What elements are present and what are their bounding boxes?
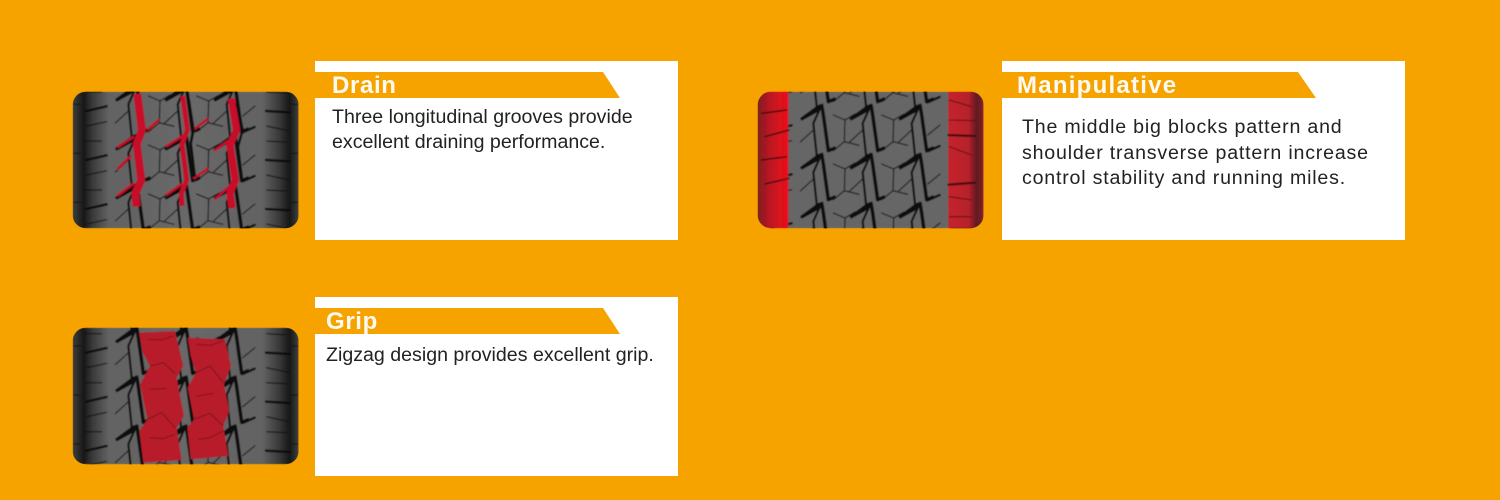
panel: manipulative [1002, 61, 1405, 240]
panel: drain [315, 61, 678, 240]
heading: drain: Drain [332, 72, 397, 99]
text: manipulative description: shoulder transverse pattern increase [1022, 142, 1369, 164]
tire tread: grip, red centre blocks [72, 328, 299, 464]
tire tread: drain, red longitudinal grooves [72, 92, 299, 228]
tire tread: manipulative, red shoulder bands [758, 92, 984, 228]
panel: grip [315, 297, 678, 476]
heading: grip: Grip [326, 308, 378, 335]
text: drain description [332, 106, 633, 153]
text: drain description: Three longitudinal grooves provide [332, 106, 633, 128]
text: grip description: Zigzag design provides excellent grip. [326, 344, 654, 366]
heading: manipulative: Manipulative [1017, 72, 1177, 99]
heading banner: manipulative [1002, 72, 1316, 98]
text: manipulative description [1022, 116, 1369, 189]
heading banner: grip [315, 308, 620, 334]
heading banner: drain [315, 72, 620, 98]
text: manipulative description: The middle big blocks pattern and [1022, 116, 1342, 138]
text: drain description: excellent draining performance. [332, 131, 605, 153]
text: manipulative description: control stability and running miles. [1022, 167, 1346, 189]
